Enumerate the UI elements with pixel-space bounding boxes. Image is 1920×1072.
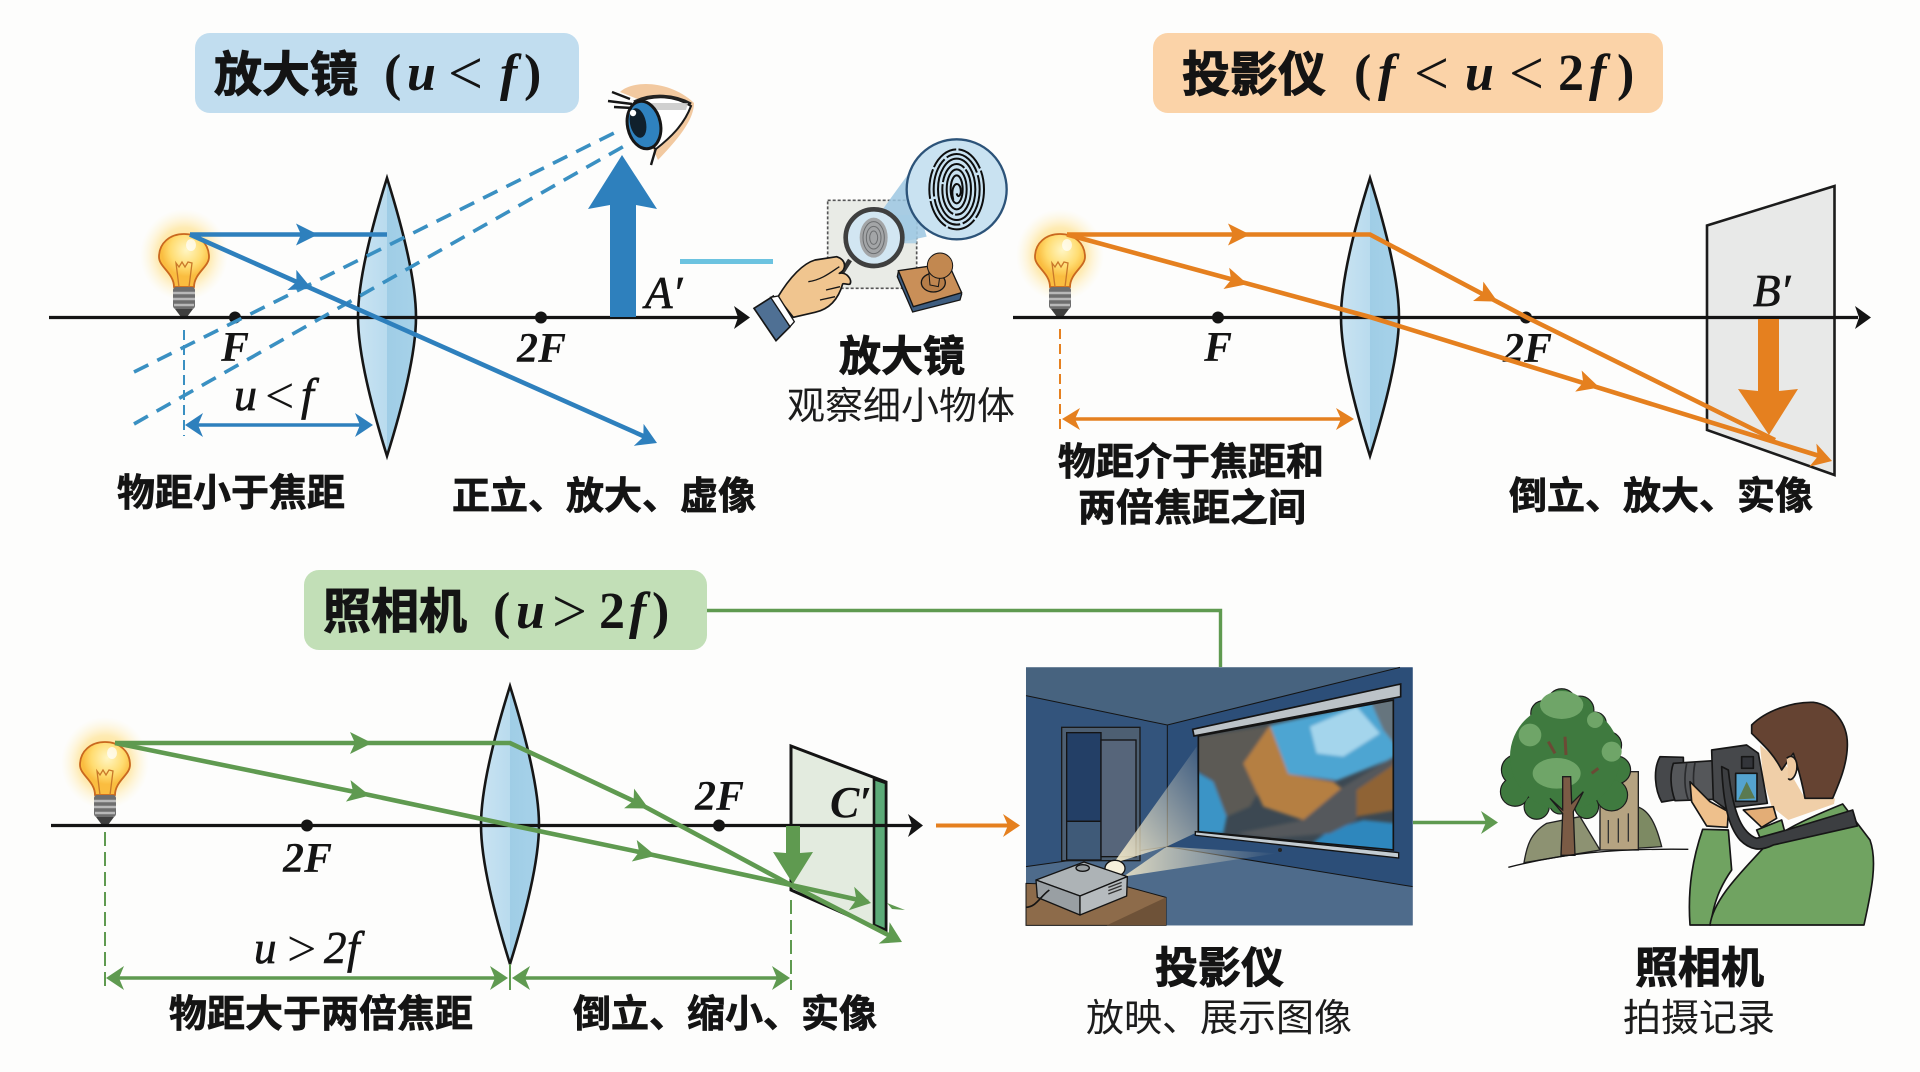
title: camera pill <box>304 570 707 650</box>
label: B': B′ <box>1753 266 1791 316</box>
label: u<f <box>234 368 320 425</box>
label: u<f: f <box>301 369 320 420</box>
distance arrow <box>1062 408 1354 430</box>
label: image projector: 倒立、放大、实像 <box>1509 476 1813 518</box>
label: u>2f: u <box>254 923 276 973</box>
lens <box>358 178 416 456</box>
title: projector pill: ) <box>1617 45 1634 102</box>
background bushes <box>1524 772 1662 863</box>
label: object distance projector: 两倍焦距之间 <box>1078 488 1306 530</box>
title: projector pill: f <box>1378 45 1400 102</box>
title: projector pill: < <box>1414 40 1449 108</box>
title: projector pill: 2 <box>1558 45 1584 102</box>
arrow: green to camera scene <box>1413 811 1498 834</box>
icon: eye <box>608 84 694 165</box>
bulb <box>61 717 149 825</box>
label: F: F <box>1203 325 1232 371</box>
refracted rays <box>115 732 907 953</box>
label: u<f: u <box>234 369 257 420</box>
title: magnifier pill: f <box>500 45 522 102</box>
label: object distance projector <box>1058 442 1324 530</box>
lens <box>1341 178 1399 456</box>
object distance marker <box>1059 329 1061 430</box>
label: image magnifier: 正立、放大、虚像 <box>452 476 756 518</box>
title: camera pill: > <box>552 578 587 646</box>
image screen <box>1707 186 1834 475</box>
title: projector pill: u <box>1465 45 1494 102</box>
label: camera use: 拍摄记录 <box>1623 998 1775 1040</box>
label: camera name: 照相机 <box>1635 945 1764 993</box>
label: A': A′ <box>642 268 683 318</box>
distance arrow <box>185 413 373 437</box>
label: u<f: < <box>265 368 294 425</box>
cyan divider <box>680 259 773 264</box>
bulb <box>1016 209 1104 317</box>
title: camera pill: 照相机 <box>323 586 467 639</box>
arrow: orange to projector <box>936 814 1020 837</box>
illustration: tree and photographer <box>1501 689 1874 925</box>
title: camera pill: ) <box>652 583 669 640</box>
icon: magnifier fingerprint illustration <box>754 139 1007 341</box>
label: C': C′ <box>830 778 872 827</box>
refracted rays <box>1067 224 1836 472</box>
title: camera pill: u <box>516 583 545 640</box>
label: object distance camera: 物距大于两倍焦距 <box>169 994 473 1036</box>
principal axis <box>49 306 750 329</box>
table <box>1026 883 1166 925</box>
label: projector use: 放映、展示图像 <box>1086 998 1352 1040</box>
label: magnifier use: 观察细小物体 <box>787 386 1015 428</box>
label: u>2f <box>254 921 365 978</box>
title: magnifier pill: 放大镜 <box>214 49 358 102</box>
connector line from camera title to projector image <box>707 610 1220 667</box>
virtual image arrow <box>588 155 657 317</box>
label: image camera: 倒立、缩小、实像 <box>573 994 877 1036</box>
label: u>2f: 2 <box>324 923 346 973</box>
label: projector name: 投影仪 <box>1155 945 1284 993</box>
title: magnifier pill: ( <box>384 45 401 102</box>
ground <box>1508 849 1688 867</box>
lens <box>481 686 539 964</box>
bulb <box>140 209 228 317</box>
label: object distance projector: 物距介于焦距和 <box>1058 442 1324 484</box>
ceiling <box>1026 667 1400 725</box>
tree <box>1501 689 1630 855</box>
title: projector pill: < <box>1509 40 1544 108</box>
title: camera pill: 2 <box>599 583 625 640</box>
person <box>1655 702 1874 925</box>
principal axis <box>51 814 923 837</box>
title: magnifier pill: u <box>407 45 436 102</box>
illustration: projector room <box>1026 667 1413 925</box>
title: projector pill <box>1153 33 1663 113</box>
door <box>1062 727 1140 861</box>
title: magnifier pill <box>195 33 579 113</box>
dashed guides <box>105 832 791 990</box>
label: 2F: 2F <box>1502 326 1552 372</box>
label: F: F <box>220 325 249 371</box>
title: magnifier pill: < <box>448 40 483 108</box>
title: projector pill: ( <box>1354 45 1371 102</box>
inverted image arrow <box>1738 319 1798 435</box>
panel: magnifier ray diagram <box>49 84 773 456</box>
label: 2F: 2F <box>516 326 566 372</box>
label: u>2f: > <box>287 921 316 978</box>
projected beam <box>1113 747 1198 863</box>
virtual dashed rays <box>134 130 626 436</box>
panel: projector ray diagram <box>1013 178 1871 475</box>
title: projector pill: f <box>1589 45 1611 102</box>
title: camera pill: f <box>629 583 651 640</box>
label: u>2f: f <box>347 923 365 973</box>
title: projector pill: 投影仪 <box>1182 49 1326 102</box>
refracted rays <box>190 224 662 454</box>
principal axis <box>1013 306 1871 329</box>
label: object distance magnifier: 物距小于焦距 <box>117 473 345 515</box>
title: magnifier pill: ) <box>524 45 541 102</box>
screen roller <box>1193 684 1401 736</box>
inverted image arrow <box>773 826 813 884</box>
label: magnifier name: 放大镜 <box>839 333 965 380</box>
title: camera pill: ( <box>493 583 510 640</box>
screen picture <box>1197 697 1397 853</box>
projector body <box>1036 860 1127 915</box>
distance arrows <box>106 966 790 990</box>
panel: camera ray diagram <box>51 686 923 990</box>
image screen <box>791 746 886 932</box>
label: 2F: 2F <box>282 836 332 882</box>
label: 2F second: 2F <box>694 774 744 820</box>
